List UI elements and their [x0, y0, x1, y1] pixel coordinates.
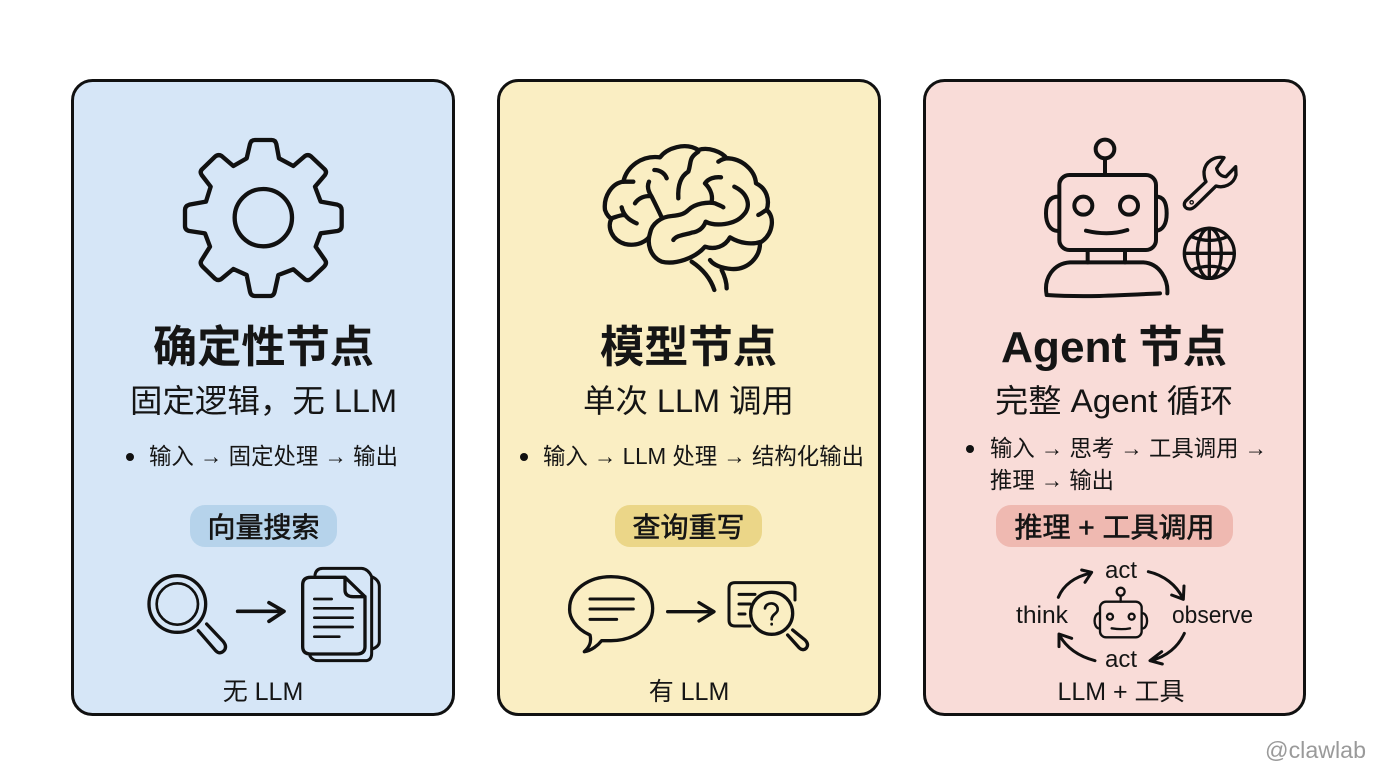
panel: agent node: [924, 80, 1304, 714]
icon: wrench: [1184, 157, 1236, 209]
tag: reasoning plus tools: 推理 + 工具调用: [1015, 512, 1214, 543]
heading: 模型节点: [600, 323, 777, 372]
bullet: flow: 推理 → 输出: [990, 467, 1114, 493]
icon: robot: [1046, 140, 1167, 296]
footer label: 无 LLM: [223, 678, 303, 706]
footer label: 有 LLM: [649, 678, 729, 706]
loop labels: observe: [1172, 602, 1253, 629]
icon: globe: [1184, 228, 1234, 278]
tag: vector search: [190, 505, 337, 547]
panel: deterministic node: [72, 80, 454, 714]
icon: mini robot: [1095, 588, 1147, 637]
watermark: @clawlab: [1265, 737, 1366, 763]
loop arrows: [1058, 570, 1184, 664]
heading: Agent 节点: [1001, 323, 1227, 372]
icon: search to documents: [149, 568, 379, 661]
loop labels: think: [1016, 602, 1069, 629]
loop labels: act: [1105, 557, 1137, 584]
heading: 确定性节点: [153, 323, 374, 372]
tag: reasoning plus tools: [996, 505, 1233, 547]
subtitle: 单次 LLM 调用: [583, 383, 794, 419]
footer label: LLM + 工具: [1057, 678, 1185, 706]
tag: vector search: 向量搜索: [207, 512, 320, 543]
loop labels: act: [1105, 646, 1137, 673]
tag: query rewrite: [615, 505, 762, 547]
icon: chat to query search: [570, 577, 808, 652]
subtitle: 完整 Agent 循环: [995, 383, 1233, 419]
loop labels: [1016, 557, 1253, 673]
bullet: flow: 输入 → 思考 → 工具调用 →: [990, 435, 1267, 461]
bullet: flow: 输入 → 固定处理 → 输出: [149, 443, 398, 469]
diagram: agent loop: [1016, 557, 1253, 673]
icon: gear: [185, 140, 342, 296]
bullet: flow: 输入 → LLM 处理 → 结构化输出: [543, 443, 864, 469]
tag: query rewrite: 查询重写: [632, 512, 745, 543]
bullet: flow: [966, 435, 1267, 493]
subtitle: 固定逻辑，无 LLM: [130, 383, 397, 419]
panel: model node: [498, 80, 880, 714]
icon: brain: [605, 146, 772, 290]
